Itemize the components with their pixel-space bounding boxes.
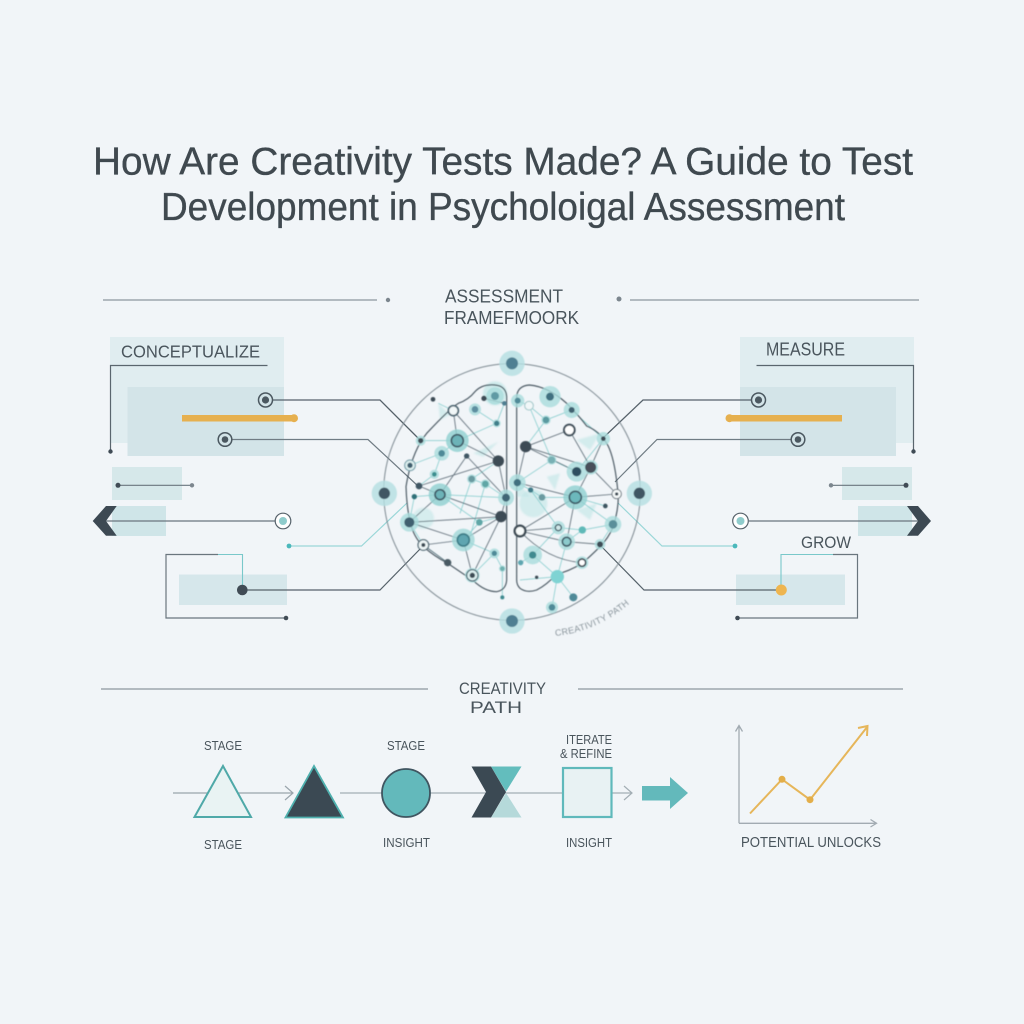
- stage labels: STAGE: [204, 837, 242, 852]
- line chart: potential unlocks: POTENTIAL UNLOCKS: [741, 834, 881, 851]
- stage: teal circle: [382, 769, 430, 817]
- brain outline: [406, 385, 618, 592]
- stage labels: STAGE: [204, 738, 242, 753]
- stage labels: ITERATE: [566, 732, 612, 747]
- stage labels: STAGE: [387, 738, 425, 753]
- stage: hourglass chevron: [472, 766, 522, 818]
- brain network diagram: [371, 350, 652, 636]
- stage labels: & REFINE: [560, 746, 612, 761]
- heading: creativity path: CREATIVITY: [459, 680, 546, 698]
- line chart: potential unlocks: [736, 726, 881, 851]
- heading: creativity path: PATH: [470, 699, 522, 717]
- heading: assessment framework: ASSESSMENT: [445, 286, 563, 306]
- title: [93, 140, 913, 229]
- panel: measure and grow: [600, 337, 931, 620]
- dark connections: [409, 398, 617, 575]
- nodes: pale halos: [372, 351, 652, 634]
- brain network diagram: CREATIVITY PATH: [554, 599, 630, 636]
- panel: measure and grow: GROW: [801, 533, 851, 552]
- title: Development in Psycholoigal Assessment: [161, 186, 845, 229]
- heading: assessment framework: [103, 286, 919, 328]
- nodes: solid cores: [379, 357, 645, 627]
- panel: conceptualize: [93, 337, 423, 620]
- stage: dark triangle: [286, 766, 343, 818]
- heading: creativity path: [101, 680, 903, 717]
- stage: outline triangle: [194, 766, 251, 817]
- teal connections: [409, 401, 613, 607]
- panel: measure and grow: MEASURE: [766, 340, 845, 360]
- heading: assessment framework: FRAMEFMOORK: [444, 307, 580, 328]
- stage: outlined square: [563, 768, 612, 817]
- title: How Are Creativity Tests Made? A Guide to Test: [93, 140, 913, 184]
- stage labels: INSIGHT: [566, 835, 612, 850]
- panel: conceptualize: CONCEPTUALIZE: [121, 342, 260, 362]
- stage labels: [204, 732, 612, 852]
- curved label: creativity path: [555, 604, 629, 636]
- arrow: teal: [642, 777, 688, 809]
- process flow: creativity path stages: [173, 732, 688, 852]
- nodes: rings: [405, 401, 621, 581]
- stage labels: INSIGHT: [383, 835, 430, 850]
